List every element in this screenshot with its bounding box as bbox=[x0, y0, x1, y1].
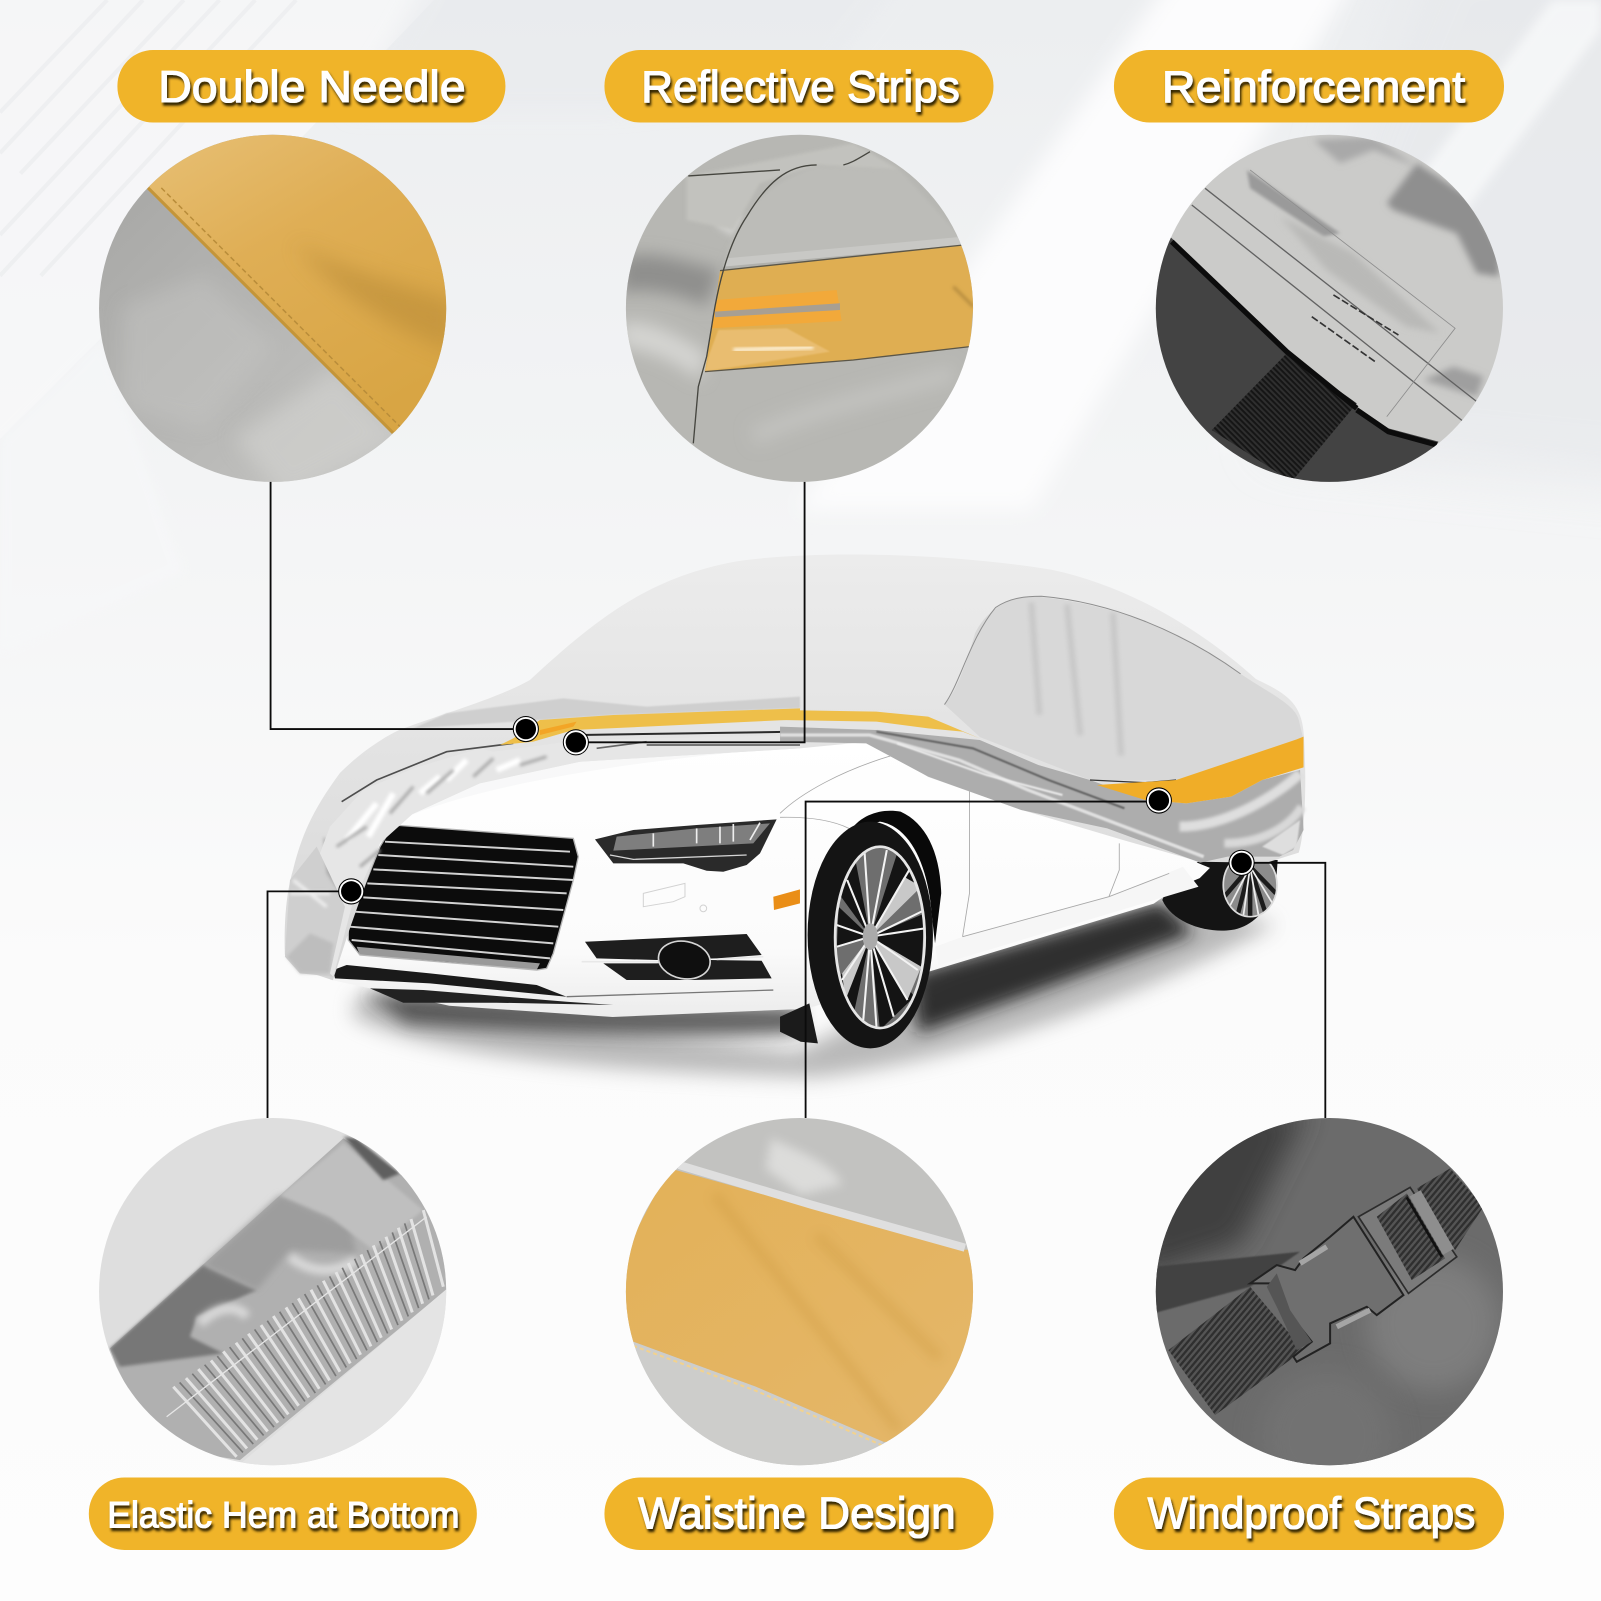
lower intake bbox=[333, 965, 567, 997]
panel: double needle bbox=[92, 50, 505, 500]
ground shadow bbox=[352, 900, 1276, 1077]
grille bbox=[348, 825, 578, 970]
pill: reinforcement: Reinforcement bbox=[1162, 61, 1466, 112]
photo: reinforced patch and strap bbox=[1156, 134, 1503, 482]
panel: elastic hem bbox=[89, 1110, 490, 1550]
photo: yellow waist band bbox=[613, 1113, 980, 1470]
front details bbox=[333, 819, 800, 1005]
photo: yellow and silver seam bbox=[99, 134, 446, 482]
photo: reflective strip on yellow band bbox=[626, 134, 974, 482]
car with cover bbox=[268, 482, 1325, 1118]
pill: windproof straps bbox=[1114, 1477, 1504, 1550]
marker dots bbox=[339, 716, 1254, 904]
pill: windproof straps: Windproof Straps bbox=[1148, 1488, 1475, 1539]
yellow band: rear bbox=[1097, 737, 1304, 803]
headlight bbox=[595, 819, 777, 872]
pill: reflective strips: Reflective Strips bbox=[641, 61, 960, 112]
car body bbox=[333, 741, 1210, 1017]
panel: reinforcement bbox=[1114, 50, 1520, 500]
pill: elastic hem at bottom: Elastic Hem at Bottom bbox=[107, 1494, 459, 1535]
pill: reinforcement bbox=[1114, 50, 1504, 123]
panel: reflective strips bbox=[604, 50, 1000, 500]
pill: double needle: Double Needle bbox=[158, 61, 466, 112]
wheel bbox=[780, 811, 941, 1048]
side of car and front wheel bbox=[780, 755, 1198, 1048]
photo: buckle and strap bbox=[1156, 1118, 1503, 1466]
rear wheel bbox=[1162, 853, 1278, 931]
pill: reflective strips bbox=[604, 50, 993, 123]
panel: windproof straps bbox=[1114, 1110, 1520, 1550]
pill: double needle bbox=[117, 50, 505, 123]
sensor bbox=[643, 883, 707, 912]
amber marker bbox=[773, 889, 800, 910]
drape and rear band bbox=[780, 710, 1304, 863]
panel: waistline design bbox=[604, 1113, 993, 1550]
leader lines bbox=[268, 482, 1325, 1118]
yellow band: hood bbox=[500, 708, 800, 745]
pill: elastic hem at bottom bbox=[89, 1477, 477, 1550]
pill: waistine design: Waistine Design bbox=[638, 1488, 956, 1539]
pill: waistine design bbox=[604, 1477, 993, 1550]
car cover bbox=[285, 554, 1305, 980]
photo: elastic hem pleats bbox=[99, 1118, 446, 1466]
sill bbox=[935, 867, 1198, 965]
fog light bbox=[582, 934, 772, 983]
left hem and hood edge bbox=[285, 697, 800, 977]
